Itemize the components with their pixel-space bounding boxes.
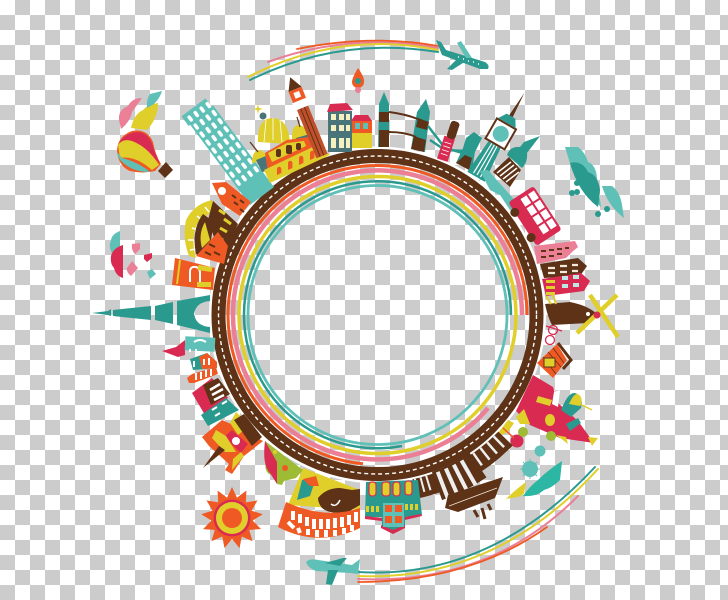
teal arch bbox=[480, 170, 518, 210]
orange band bbox=[228, 166, 527, 464]
building: orange hut bbox=[537, 343, 571, 378]
road bbox=[218, 156, 536, 474]
building: small teal and red house bbox=[190, 353, 217, 370]
temple base bbox=[445, 477, 503, 512]
road halo bbox=[210, 148, 544, 482]
orange midsection bbox=[265, 137, 314, 172]
tall columns bbox=[437, 465, 478, 486]
red house bbox=[542, 273, 590, 296]
dome bbox=[507, 136, 540, 168]
small domes bbox=[252, 150, 268, 163]
left tower bbox=[378, 92, 389, 147]
pink band bbox=[233, 170, 522, 459]
building: orange arch gate bbox=[172, 258, 215, 290]
building: pink spire chapel bbox=[162, 336, 215, 357]
building: arcade shop bbox=[365, 480, 422, 534]
building: columned temple bbox=[408, 436, 506, 519]
building: domed cathedral bbox=[480, 136, 540, 210]
yellow dome bbox=[545, 414, 555, 426]
icon: top airplane bbox=[436, 40, 489, 70]
suspension span bbox=[428, 126, 470, 155]
balloon envelope bbox=[117, 130, 161, 172]
top flight trail bbox=[248, 41, 438, 80]
building: small orange house bbox=[187, 367, 218, 383]
bottom flight trail bbox=[358, 467, 598, 582]
walkways bbox=[389, 112, 418, 137]
central ring road with rainbow bands bbox=[210, 148, 544, 482]
building: red cathedral bbox=[516, 375, 598, 446]
icon: rain clouds bbox=[565, 147, 624, 218]
pink cloud bbox=[119, 98, 142, 129]
yellow base bbox=[264, 145, 330, 183]
icon: windmill bbox=[545, 295, 618, 337]
brown house bbox=[540, 258, 587, 278]
basket bbox=[278, 502, 360, 538]
building: flag bazaar bbox=[264, 441, 303, 485]
main dome bbox=[258, 118, 290, 144]
icon: cloud and hearts bbox=[110, 231, 156, 279]
building: leaning tower bbox=[181, 97, 274, 206]
flowers bbox=[297, 478, 316, 500]
teal spire band bbox=[566, 418, 581, 431]
icon: sun bbox=[200, 487, 264, 550]
dark teal band bbox=[244, 181, 511, 448]
far tower bbox=[456, 132, 482, 170]
colonnade band bbox=[414, 439, 506, 489]
building: yellow colosseum bbox=[185, 200, 214, 258]
building: orange gabled house bbox=[212, 182, 251, 216]
building: red and teal houses bbox=[192, 378, 239, 426]
building: small red roof house bbox=[351, 115, 372, 148]
colonnade bbox=[493, 157, 521, 187]
icon: hot air balloon and clouds bbox=[117, 91, 173, 178]
building: clock tower bbox=[466, 87, 535, 183]
building: bell tower bbox=[283, 74, 329, 159]
yellow cloud bbox=[131, 103, 158, 130]
onion dome bbox=[561, 393, 582, 417]
basket bbox=[158, 162, 173, 178]
icon: teal and yellow clouds bbox=[506, 461, 562, 499]
building: domed basilica bbox=[250, 104, 330, 183]
icon: water drop bbox=[352, 68, 364, 93]
icon: fruit bbox=[494, 420, 528, 448]
building: row houses bbox=[202, 412, 263, 474]
bull bbox=[318, 488, 360, 513]
icon: snowflakes bbox=[520, 446, 546, 479]
building: teal townhouse bbox=[327, 103, 353, 152]
icon: bottom airplane bbox=[306, 558, 360, 585]
icon: red phone box bbox=[437, 119, 460, 162]
right tower bbox=[411, 99, 430, 152]
icon: double decker bus bbox=[504, 186, 562, 248]
building: brown and orange block bbox=[196, 201, 238, 264]
icon: bicycle bbox=[546, 326, 562, 344]
column gaps bbox=[408, 436, 505, 499]
base ornaments bbox=[474, 504, 491, 519]
yellow band bbox=[239, 176, 516, 454]
teal cloud bbox=[147, 91, 162, 108]
building: tower bridge bbox=[378, 92, 482, 170]
yellow arches bbox=[516, 409, 530, 424]
building: dutch houses bbox=[534, 241, 590, 296]
drums bbox=[256, 156, 272, 172]
pink house bbox=[534, 241, 578, 264]
building: eiffel tower bbox=[92, 295, 210, 333]
dome finial bbox=[260, 112, 266, 120]
icon: bull market bbox=[278, 468, 360, 538]
light teal band bbox=[248, 186, 507, 444]
